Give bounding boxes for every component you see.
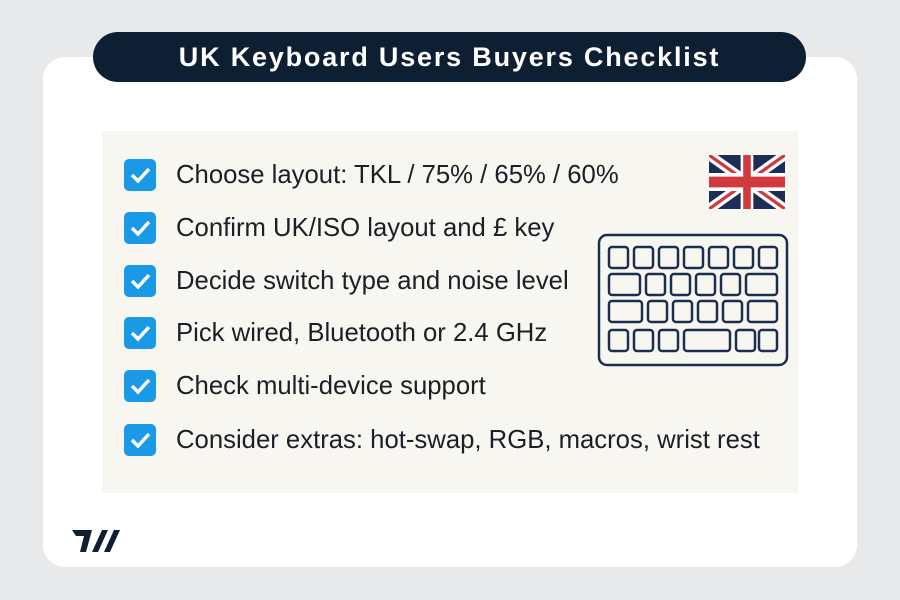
title: UK Keyboard Users Buyers Checklist: [179, 42, 720, 72]
item 2: Confirm UK/ISO layout and £ key: [176, 214, 554, 242]
icon: keyboard: [598, 234, 788, 366]
icon: UK flag: [709, 155, 785, 209]
title: [93, 32, 806, 82]
item 1: Choose layout: TKL / 75% / 65% / 60%: [176, 161, 619, 189]
item 3: Decide switch type and noise level: [176, 267, 569, 295]
item 4: Pick wired, Bluetooth or 2.4 GHz: [176, 319, 547, 347]
panel: checklist: [102, 131, 798, 493]
logo: [72, 530, 120, 552]
item 5: Check multi-device support: [176, 372, 486, 400]
card: [43, 57, 857, 567]
item 6: Consider extras: hot-swap, RGB, macros, wrist rest: [176, 426, 760, 454]
